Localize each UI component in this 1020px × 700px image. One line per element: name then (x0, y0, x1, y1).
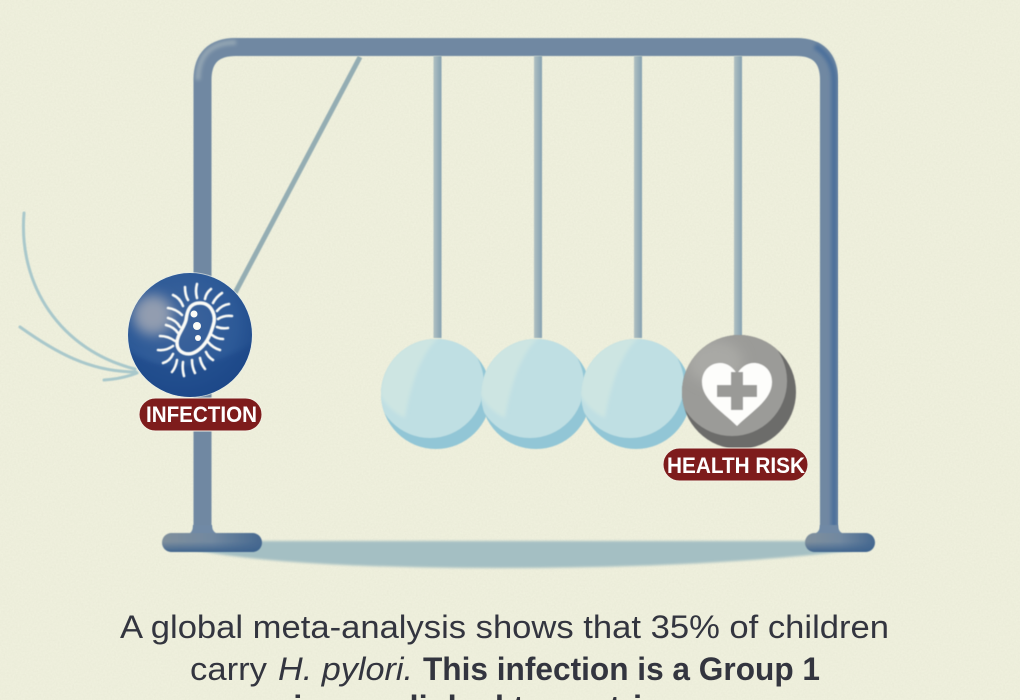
caption text: A global meta-analysis shows that 35% of children (120, 609, 889, 645)
label: health risk: HEALTH RISK (667, 453, 805, 478)
icon: bacterium (158, 284, 232, 376)
motion arrows (20, 213, 137, 380)
left base foot (162, 525, 262, 552)
cradle frame (198, 42, 834, 540)
bacterium spots (190, 310, 201, 341)
light ball 3 (581, 338, 687, 450)
base shadow (178, 541, 865, 568)
light ball 1 (380, 338, 486, 450)
infection ball with bacterium icon (127, 272, 253, 400)
caption text (120, 609, 889, 700)
pendulum strings (235, 56, 742, 338)
icon: heart with cross (702, 363, 772, 426)
light ball 2 (481, 338, 586, 450)
label: infection: INFECTION (146, 402, 257, 427)
caption text: carry (190, 651, 267, 687)
caption text: This infection is a Group 1 (423, 651, 820, 687)
caption text: H. pylori. (278, 651, 413, 687)
health risk ball with heart icon (682, 334, 797, 448)
right base foot (805, 525, 875, 552)
